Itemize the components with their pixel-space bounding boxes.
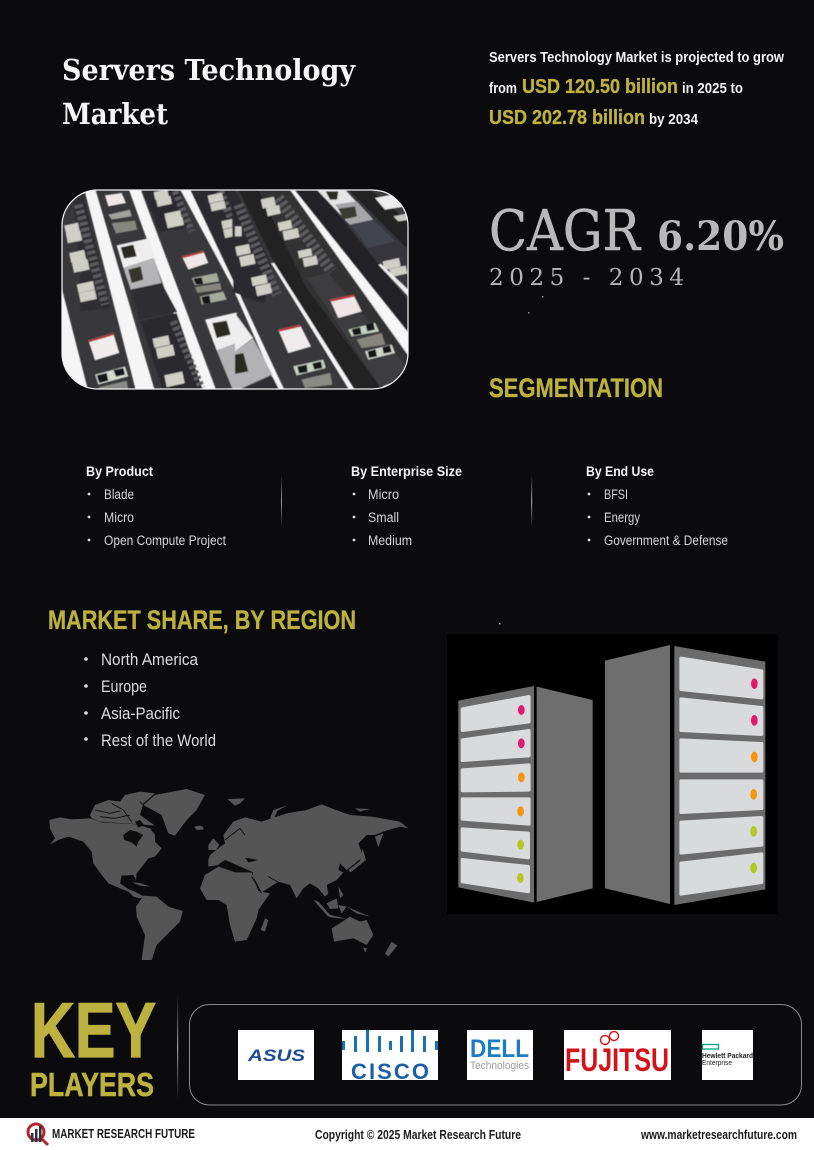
black band two [292,188,410,335]
segment: by end use: Energy [604,510,640,525]
photo: server power strips [60,188,410,391]
black band [238,190,383,391]
strip four panel [278,326,332,388]
strip six [338,190,408,300]
logo: hewlett packard enterprise: Hewlett Packard [702,1051,753,1060]
segment: by enterprise size: By Enterprise Size [351,463,462,479]
region list: Rest of the World [101,731,216,750]
arctic islands [90,792,155,826]
logo: dell technologies: Technologies [470,1060,529,1072]
strip four outlets and sockets [232,188,272,303]
region list: Europe [101,677,147,696]
key players heading: KEY [31,986,156,1074]
footer brand: MARKET RESEARCH FUTURE [52,1127,195,1141]
segment: by product [86,463,226,548]
photo border [62,190,408,389]
title: Servers Technology [62,53,356,87]
segment: by end use: BFSI [604,487,628,502]
segment: by end use: Government & Defense [604,533,728,548]
CAGR value: CAGR [489,199,642,264]
logo: cisco: CISCO [351,1059,429,1084]
madagascar [261,918,268,932]
market projection text: by 2034 [649,111,699,128]
market projection text: USD 202.78 billion [489,107,645,129]
strip two detail [105,193,126,206]
strip four detail [190,190,234,281]
svalbard, britain, islands [194,826,203,830]
CAGR value: 6.20% [657,213,784,260]
strip one label and ports [88,333,119,360]
logo: asus [238,1030,314,1080]
logo: asus: ASUS [247,1046,306,1065]
segment: by product: Micro [104,510,134,525]
white lines [235,293,285,391]
market projection text: from [489,80,517,97]
market projection text: USD 120.50 billion [522,76,678,98]
strip one outlets [64,223,97,302]
footer bar [0,1118,814,1150]
white stripes left [60,188,237,391]
key players heading [30,986,156,1103]
segment: by end use: By End Use [586,463,654,479]
iceland [194,826,204,830]
footer copyright: Copyright © 2025 Market Research Future [315,1128,521,1142]
white wide stripe [290,190,410,358]
logo: dell technologies: DELL [470,1035,529,1063]
strip seven [350,190,408,249]
heading: segmentation: SEGMENTATION [489,373,663,403]
new zealand [385,942,397,957]
market projection text: in 2025 to [682,80,743,97]
segment: by enterprise size: Medium [368,533,412,548]
strip three tail [235,313,253,351]
large rack [605,645,670,904]
CAGR value [489,199,784,291]
eurasia [208,804,408,898]
region list: Asia-Pacific [101,704,180,723]
australia [332,917,373,945]
market projection text [489,49,784,129]
segment: by enterprise size: Micro [368,487,399,502]
south america [136,896,183,960]
segment: by product: Open Compute Project [104,533,226,548]
segment: by end use [586,463,728,548]
world map [49,789,408,960]
logo: dell technologies [467,1030,533,1080]
region list [84,650,216,750]
title [62,53,356,131]
logo: hewlett packard enterprise: Enterprise [702,1060,732,1067]
north america [49,817,162,898]
region list: North America [101,650,198,669]
greenland [143,789,205,836]
strip one sockets [73,195,110,311]
inland seas [218,858,258,872]
logo: fujitsu: FUJITSU [565,1042,669,1078]
segment: by product: By Product [86,463,153,479]
key players panel [190,1004,802,1105]
strip three detail [140,190,187,231]
hudson bay and arctic channels [123,820,144,847]
logo: hewlett packard enterprise [702,1030,753,1080]
segment: by product: Blade [104,487,134,502]
logo: fujitsu [564,1030,671,1080]
segment: by enterprise size [351,463,462,548]
heading: market share by region: MARKET SHARE, BY REGION [48,605,356,635]
africa [200,867,270,942]
key players heading: PLAYERS [30,1066,154,1103]
small rack [458,686,534,903]
specks [499,296,544,624]
title: Market [62,97,169,131]
segment: by enterprise size: Small [368,510,399,525]
logo: cisco [342,1030,438,1084]
CAGR value: 2025 - 2034 [489,265,684,291]
footer logo [28,1124,48,1145]
server illustration [447,634,778,914]
strip five [261,190,408,364]
caribbean islands [132,882,151,887]
